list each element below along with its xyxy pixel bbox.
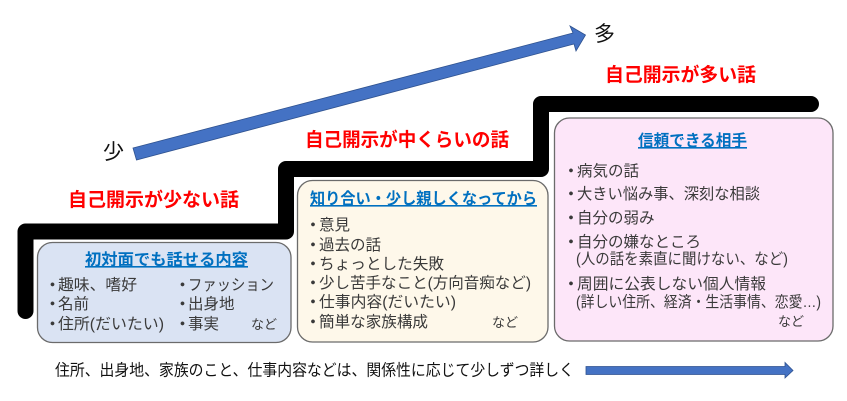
- list: ・: [306, 217, 321, 234]
- list right column: ・: [175, 316, 190, 333]
- list: ・: [306, 256, 321, 273]
- list: 大きい悩み事、深刻な相談: [577, 185, 760, 203]
- list left column: 趣味、嗜好: [58, 276, 137, 294]
- panel: trusted person: [554, 118, 833, 341]
- heading: medium disclosure: 自己開示が中くらいの話: [305, 128, 509, 151]
- heading: high disclosure: 自己開示が多い話: [605, 63, 756, 86]
- list right column: [175, 277, 274, 333]
- bottom arrow: [586, 362, 793, 378]
- list: 簡単な家族構成: [319, 313, 428, 331]
- list: ・: [306, 314, 321, 331]
- etc note: など: [492, 315, 518, 330]
- list: ・: [564, 234, 579, 251]
- panel title: 知り合い・少し親しくなってから: [310, 189, 537, 208]
- list: ・: [564, 210, 579, 227]
- list: 少し苦手なこと(方向音痴など): [319, 274, 531, 292]
- list: ・: [306, 275, 321, 292]
- panel: acquaintance: [298, 180, 548, 342]
- list: 自分の嫌なところ: [577, 233, 701, 251]
- panel: first meeting: [38, 242, 291, 342]
- list left column: 住所(だいたい): [58, 315, 164, 333]
- list right column: ファッション: [188, 277, 274, 294]
- panel title: 初対面でも話せる内容: [85, 250, 248, 269]
- list: (詳しい住所、経済・生活事情、恋愛…): [576, 293, 821, 311]
- list: ・: [564, 163, 579, 180]
- etc note: など: [778, 314, 804, 329]
- label: many: 多: [594, 23, 615, 46]
- list: 過去の話: [319, 236, 381, 254]
- list left column: ・: [45, 296, 60, 313]
- list: 自分の弱み: [577, 209, 655, 227]
- heading: low disclosure: 自己開示が少ない話: [68, 188, 239, 211]
- list left column: [45, 276, 164, 333]
- list right column: ・: [175, 296, 190, 313]
- list: 意見: [319, 216, 350, 234]
- list: ・: [564, 186, 579, 203]
- footer note: 住所、出身地、家族のこと、仕事内容などは、関係性に応じて少しずつ詳しく: [55, 362, 574, 380]
- list: ・: [306, 237, 321, 254]
- list: 周囲に公表しない個人情報: [577, 275, 766, 293]
- list: 仕事内容(だいたい): [319, 293, 456, 311]
- list right column: 事実: [188, 315, 219, 333]
- list: 病気の話: [577, 162, 639, 180]
- list: ・: [306, 294, 321, 311]
- list right column: ・: [175, 277, 190, 294]
- list right column: 出身地: [188, 295, 235, 313]
- list: (人の話を素直に聞けない、など): [576, 250, 788, 268]
- list left column: ・: [45, 316, 60, 333]
- panel title: 信頼できる相手: [638, 131, 747, 150]
- list left column: 名前: [58, 295, 89, 313]
- staircase line: [26, 104, 811, 311]
- list: [306, 216, 531, 331]
- label: few: 少: [103, 141, 124, 164]
- list: [564, 162, 821, 311]
- list: ・: [564, 276, 579, 293]
- list left column: ・: [45, 277, 60, 294]
- diagonal arrow: [133, 26, 586, 160]
- list: ちょっとした失敗: [319, 255, 444, 273]
- etc note: など: [251, 317, 277, 332]
